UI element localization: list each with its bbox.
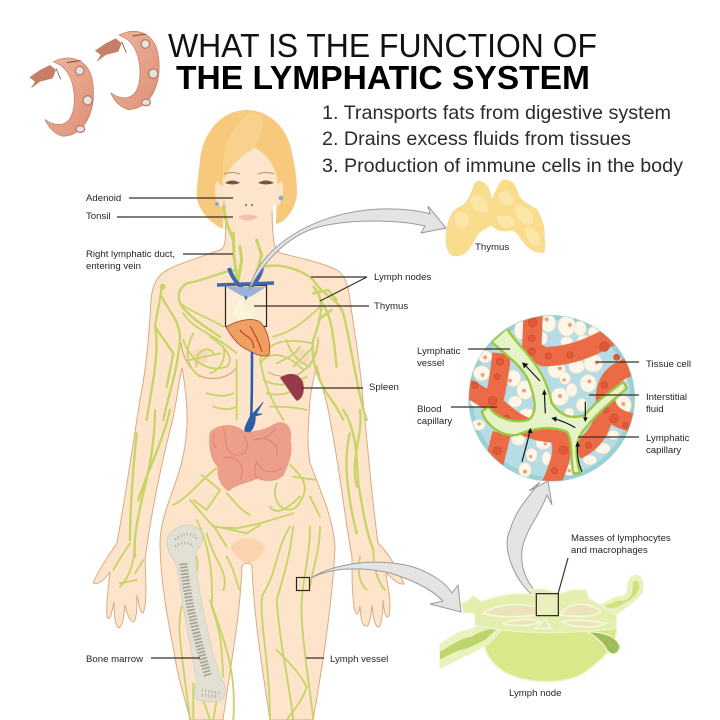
blood capillaries bbox=[469, 316, 633, 481]
veins bbox=[229, 268, 262, 296]
face bbox=[223, 145, 277, 235]
label: Lymphatic vessel: Lymphatic bbox=[417, 346, 461, 357]
aorta vessel bbox=[251, 352, 252, 420]
title bbox=[168, 28, 597, 97]
microscopic tissue circle bbox=[468, 315, 635, 482]
medulla compartments bbox=[483, 604, 607, 628]
label: Masses of lymphocytes bbox=[558, 533, 671, 594]
label: Lymphatic capillary bbox=[578, 433, 690, 456]
lymph vessels lower body bbox=[113, 410, 385, 720]
earrings studs bbox=[215, 202, 219, 206]
upper cortex bbox=[462, 589, 617, 633]
lower node mass bbox=[483, 628, 617, 682]
efferent vessel bbox=[587, 632, 620, 654]
highlight box bbox=[536, 594, 558, 616]
lymph vessels upper body bbox=[147, 207, 367, 420]
label: Lymph nodes bbox=[311, 272, 431, 301]
label: Masses of lymphocytes: Masses of lymphocytes bbox=[571, 533, 671, 544]
label: Interstitial fluid: fluid bbox=[646, 404, 664, 415]
spleen bbox=[280, 374, 304, 401]
intestines bbox=[210, 423, 291, 491]
label: Right lymphatic duct bbox=[86, 249, 233, 272]
body outline bbox=[93, 200, 404, 720]
arrow: chest to thymus bbox=[249, 206, 446, 290]
label: Blood capillary: capillary bbox=[417, 416, 452, 427]
label: Spleen bbox=[301, 382, 399, 393]
label: Lymph node: Lymph node bbox=[509, 688, 561, 699]
label: Lymph nodes: Lymph nodes bbox=[374, 272, 431, 283]
label: Interstitial fluid: Interstitial bbox=[646, 392, 687, 403]
hair back bbox=[197, 110, 297, 229]
femur bone marrow bbox=[167, 525, 226, 702]
groin shading bbox=[230, 538, 265, 563]
label: Lymphatic capillary: capillary bbox=[646, 445, 681, 456]
thymus illustration bbox=[446, 180, 545, 256]
areolas bbox=[192, 349, 208, 365]
title: THE LYMPHATIC SYSTEM bbox=[176, 60, 590, 97]
left afferent vessel bbox=[440, 625, 505, 668]
label: Adenoid: Adenoid bbox=[86, 193, 121, 204]
arrow: thigh to lymph node bbox=[311, 562, 461, 612]
label: Blood capillary bbox=[417, 404, 497, 427]
flow arrows bbox=[522, 365, 585, 472]
label: Spleen: Spleen bbox=[369, 382, 399, 393]
breast outlines bbox=[180, 335, 318, 378]
brows bbox=[224, 172, 274, 174]
label: Tissue cell bbox=[596, 359, 691, 370]
function list: 3. Production of immune cells in the body bbox=[322, 155, 683, 177]
hair parting bbox=[223, 112, 263, 180]
label: Lymphatic vessel: vessel bbox=[417, 358, 444, 369]
label: Lymph vessel: Lymph vessel bbox=[330, 654, 388, 665]
label: Thymus: Thymus bbox=[475, 242, 509, 253]
human body figure bbox=[93, 110, 404, 720]
heart bbox=[226, 319, 270, 356]
ears bbox=[215, 181, 283, 208]
right vessel bbox=[600, 575, 644, 615]
label: Right lymphatic duct: entering vein bbox=[86, 261, 141, 272]
nose and lips bbox=[245, 204, 253, 206]
label: Tonsil: Tonsil bbox=[86, 211, 111, 222]
lymph node illustration bbox=[440, 575, 644, 682]
function list: 2. Drains excess fluids from tissues bbox=[322, 128, 631, 150]
eyes bbox=[225, 180, 274, 184]
tissue cells bbox=[470, 315, 631, 477]
liver vein blob bbox=[245, 402, 263, 434]
label: Bone marrow: Bone marrow bbox=[86, 654, 143, 665]
label: Tissue cell: Tissue cell bbox=[646, 359, 691, 370]
label: Interstitial fluid bbox=[589, 392, 687, 415]
thymus highlight box bbox=[226, 286, 266, 326]
function list bbox=[322, 102, 683, 177]
label: Lymphatic vessel bbox=[417, 346, 510, 369]
thymus in chest bbox=[232, 295, 258, 322]
callout labels with leader lines bbox=[86, 193, 691, 699]
icon: rose gold earrings bbox=[29, 31, 159, 136]
label: Blood capillary: Blood bbox=[417, 404, 442, 415]
label: Bone marrow bbox=[86, 654, 200, 665]
lymphatic vessels bbox=[482, 328, 627, 473]
label: Masses of lymphocytes: and macrophages bbox=[571, 545, 648, 556]
title: WHAT IS THE FUNCTION OF bbox=[168, 28, 597, 65]
thigh sample box bbox=[296, 578, 310, 590]
function list: 1. Transports fats from digestive system bbox=[322, 102, 671, 124]
label: Thymus chest: Thymus bbox=[374, 301, 408, 312]
arrow: lymph node to circle bbox=[507, 481, 552, 596]
label: Right lymphatic duct: Right lymphatic duct, bbox=[86, 249, 175, 260]
label: Lymphatic capillary: Lymphatic bbox=[646, 433, 690, 444]
